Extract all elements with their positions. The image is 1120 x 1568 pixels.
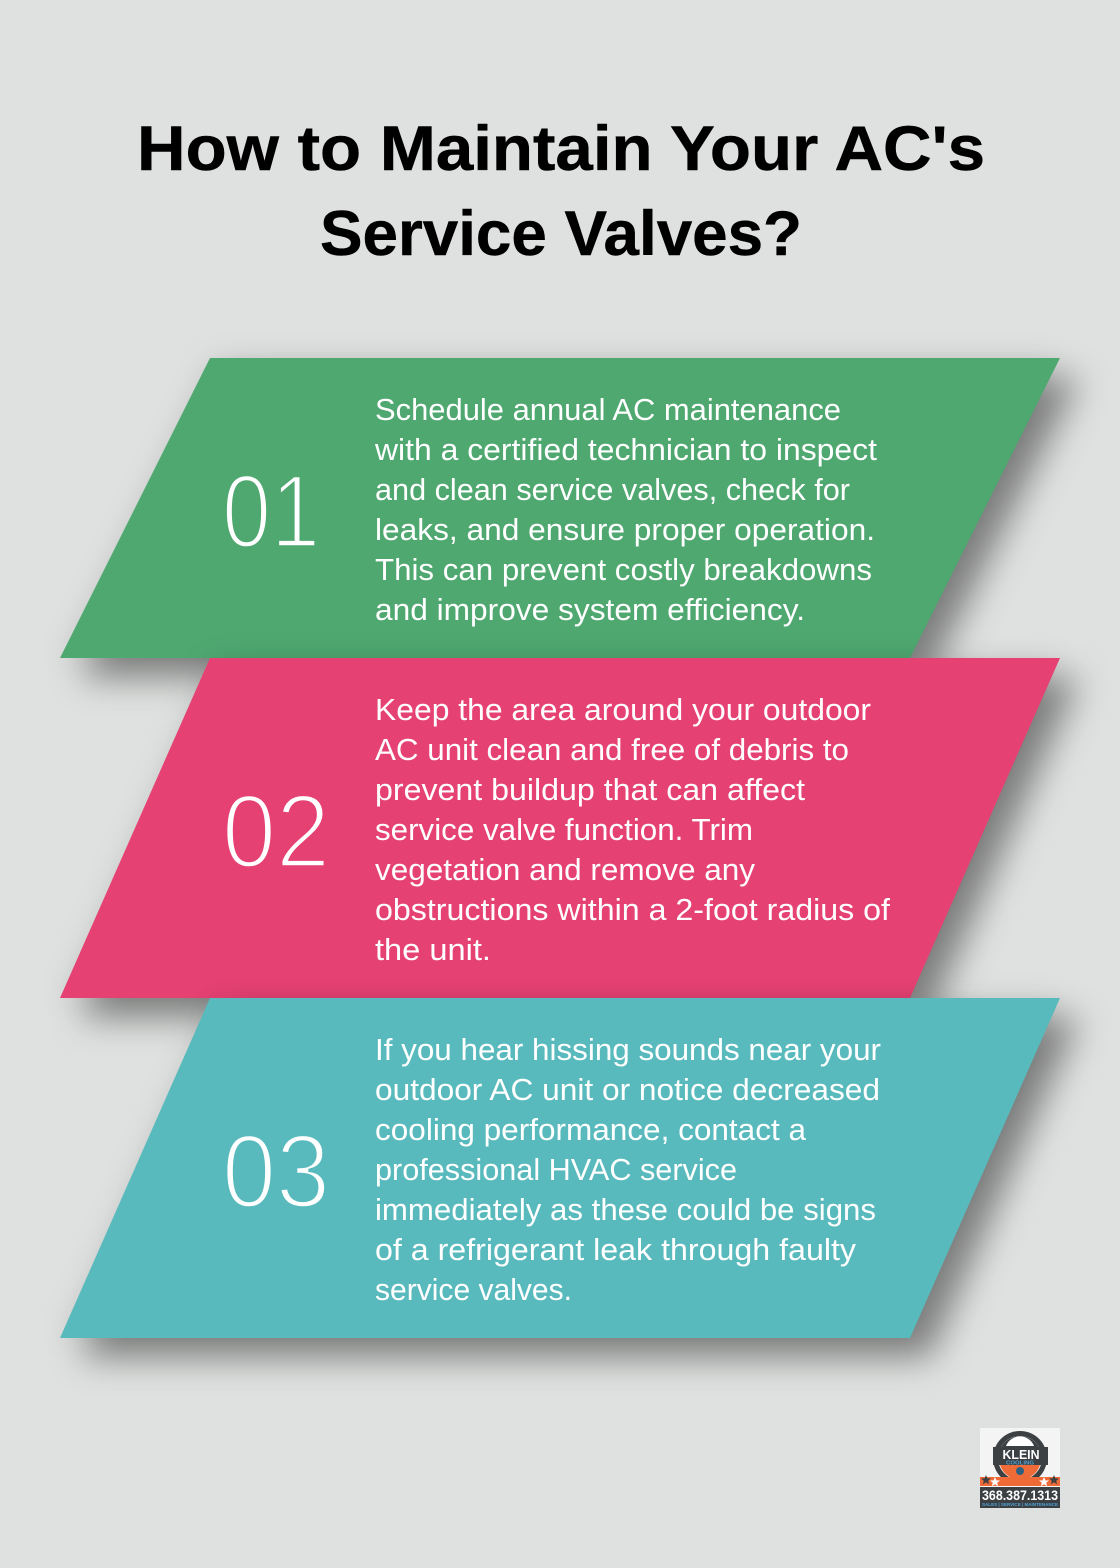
text: step 02 description: AC unit clean and free of debris to	[375, 732, 849, 767]
text: step 02 description: Keep the area around your outdoor	[375, 692, 871, 727]
text: step 03 description: If you hear hissing sounds near your	[375, 1032, 881, 1067]
text: step 01 description: This can prevent costly breakdowns	[375, 552, 872, 587]
text: step 01 description: and improve system efficiency.	[375, 592, 805, 627]
text: step 03 description: outdoor AC unit or notice decreased	[375, 1072, 880, 1107]
number 01: 01	[222, 454, 320, 570]
panel: step 02	[60, 658, 1080, 1018]
text: step 01 description: and clean service valves, check for	[375, 472, 850, 507]
text: step 03 description: immediately as these could be signs	[375, 1192, 876, 1227]
panel shape: teal parallelogram	[60, 998, 1060, 1338]
text: step 03 description: cooling performance, contact a	[375, 1112, 807, 1147]
panel shape: green parallelogram	[60, 358, 1060, 658]
text: step 03 description: service valves.	[375, 1272, 572, 1307]
logo phone number: 368.387.1313	[982, 1488, 1058, 1503]
logo: Klein Cooling	[980, 1428, 1060, 1508]
panel shape: pink parallelogram	[60, 658, 1060, 998]
text: step 02 description: prevent buildup that can affect	[375, 772, 805, 807]
logo phone number	[980, 1487, 1060, 1508]
title: Service Valves?	[320, 199, 802, 269]
logo badge: KLEIN	[1002, 1447, 1040, 1462]
text: step 02 description	[375, 692, 890, 967]
text: step 01 description: leaks, and ensure proper operation.	[375, 512, 875, 547]
text: step 02 description: the unit.	[375, 932, 491, 967]
logo badge	[993, 1431, 1048, 1485]
text: step 03 description	[375, 1032, 881, 1307]
text: step 03 description: of a refrigerant leak through faulty	[375, 1232, 857, 1267]
number 02: 02	[222, 774, 330, 890]
title	[137, 114, 985, 269]
panel: step 03	[60, 998, 1080, 1358]
text: step 01 description: Schedule annual AC maintenance	[375, 392, 841, 427]
logo stripe with stars	[980, 1475, 1060, 1486]
logo phone number: SALES | SERVICE | MAINTENANCE	[982, 1502, 1058, 1507]
text: step 02 description: obstructions within a 2-foot radius of	[375, 892, 890, 927]
text: step 02 description: service valve function. Trim	[375, 812, 753, 847]
text: step 01 description: with a certified technician to inspect	[374, 432, 877, 467]
text: step 03 description: professional HVAC service	[375, 1152, 737, 1187]
number 03: 03	[222, 1114, 330, 1230]
text: step 02 description: vegetation and remove any	[375, 852, 756, 887]
logo badge: COOLING	[1006, 1460, 1034, 1466]
text: step 01 description	[374, 392, 877, 627]
title: How to Maintain Your AC's	[137, 114, 985, 184]
panel: step 01	[60, 358, 1080, 678]
